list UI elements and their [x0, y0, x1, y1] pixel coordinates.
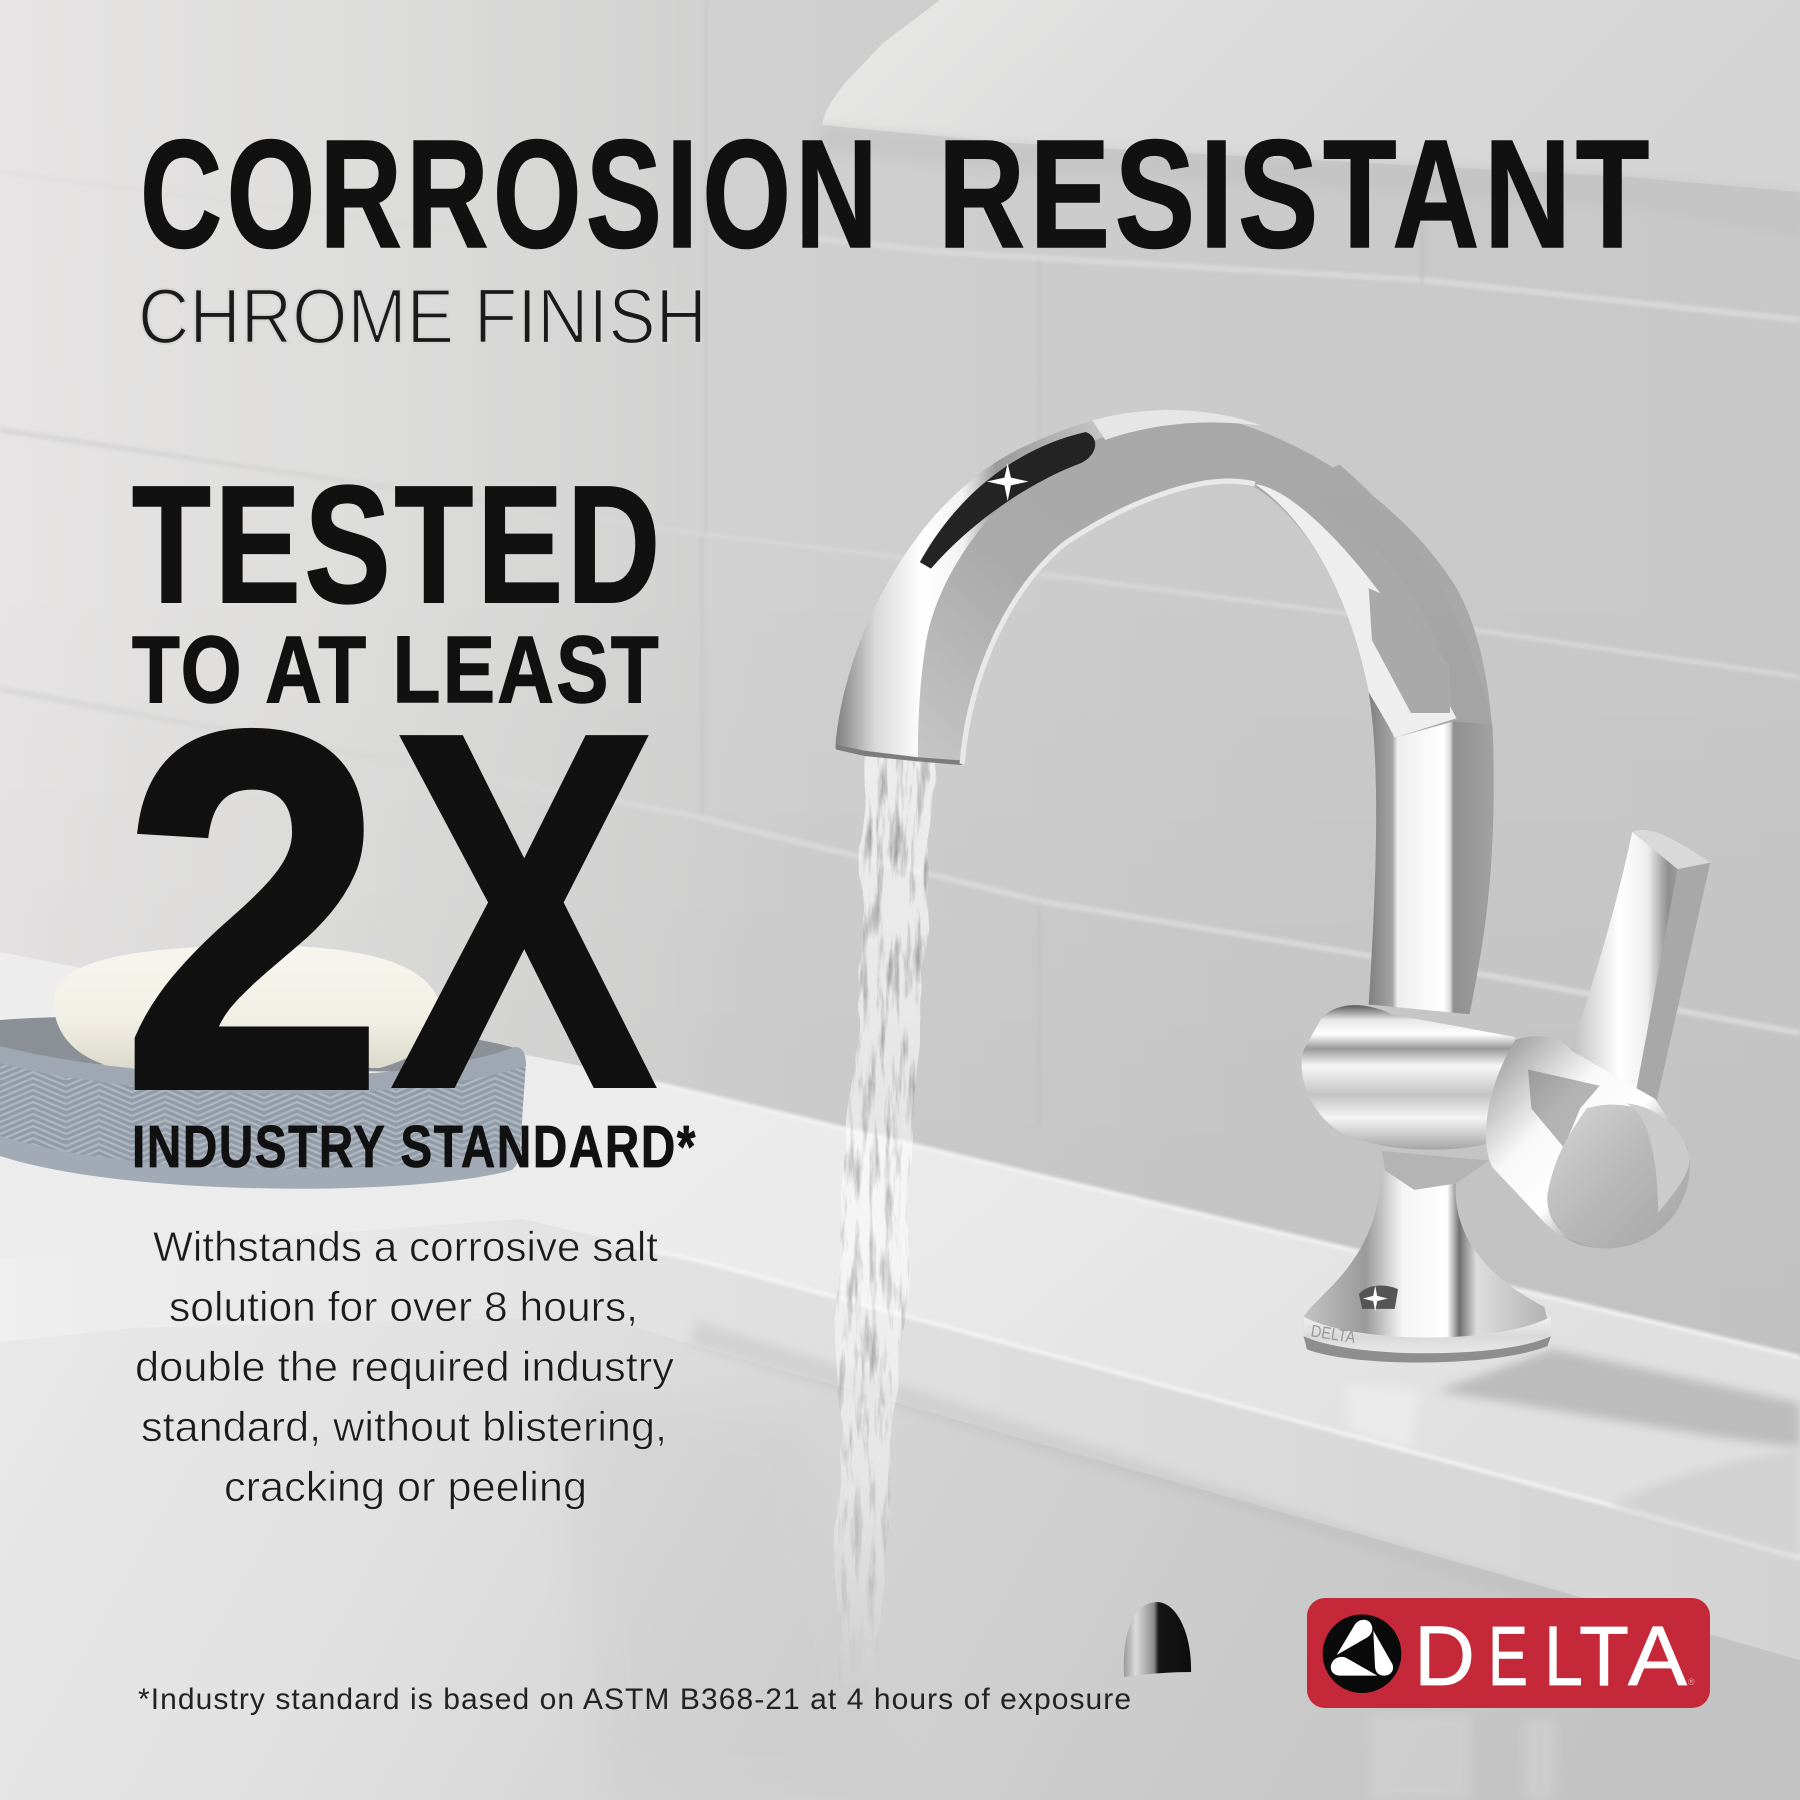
spout arch [835, 411, 1494, 1011]
counter back ledge [597, 1069, 1800, 1357]
lever top facet [1632, 830, 1710, 869]
logo emblem [1323, 1614, 1401, 1693]
logo wordmark: E [1488, 1609, 1528, 1703]
lever right facet [1635, 863, 1710, 1109]
soap bar [54, 945, 441, 1068]
base engraved mark: DELTA [1309, 1322, 1357, 1348]
spout right outer band [1294, 465, 1494, 1011]
body description text [135, 1223, 674, 1510]
logo wordmark: D [1414, 1609, 1475, 1703]
tile grout lines [0, 0, 1800, 1125]
big number: 2X [121, 626, 661, 1196]
overflow hole [1124, 1602, 1191, 1677]
fixture under-shadow [822, 125, 1800, 235]
lever handle [1570, 830, 1710, 1109]
big number: 2X: 2 [121, 626, 385, 1196]
base ring [1304, 1317, 1551, 1357]
barrel body [1302, 1005, 1515, 1150]
nozzle edge [835, 744, 962, 765]
logo wordmark [1414, 1609, 1687, 1703]
sparkle [987, 463, 1028, 501]
soap dish with soap [0, 945, 526, 1189]
base gasket [1304, 1336, 1551, 1363]
logo wordmark: A [1628, 1609, 1687, 1703]
falling water stream [836, 755, 932, 1695]
heading: corrosion resistant: CORROSION [140, 108, 882, 280]
spout front face [835, 409, 1170, 759]
dish patterned wall [0, 1060, 526, 1171]
footnote: *Industry standard is based on ASTM B368-21 at 4 hours of exposure [138, 1683, 1131, 1716]
dish rim [0, 1046, 526, 1093]
counter front band [0, 1219, 1800, 1660]
front band highlight edge [600, 1240, 1800, 1558]
basin curve on counter [1610, 1448, 1800, 1558]
inner reflection [1369, 588, 1450, 713]
stem top reflection [1382, 1151, 1489, 1190]
Delta logo [1307, 1598, 1710, 1708]
big number: 2X: X [389, 626, 661, 1196]
sink front below counter [0, 1313, 1800, 1800]
body description text: cracking or peeling [224, 1463, 587, 1510]
counter top surface [0, 952, 1800, 1558]
wall lower shade [0, 0, 1800, 1400]
dish foot [0, 1136, 522, 1189]
claim: tested: TESTED [132, 452, 664, 638]
logo wordmark: T [1579, 1609, 1629, 1703]
body description text: Withstands a corrosive salt [153, 1223, 658, 1270]
claim: to at least: TO AT LEAST [132, 617, 661, 723]
subheading: chrome finish: CHROME FINISH [138, 272, 707, 360]
logo wordmark: L [1544, 1609, 1583, 1703]
lever hub [1486, 1036, 1688, 1248]
body description text: solution for over 8 hours, [169, 1283, 638, 1330]
column [1369, 692, 1494, 1014]
top rim highlight [1092, 410, 1261, 440]
faucet reflections on counter [1345, 1385, 1420, 1450]
inner rim line [962, 481, 1255, 764]
chrome faucet [835, 409, 1710, 1363]
stem and flared base [1304, 1151, 1551, 1363]
heading: corrosion resistant [140, 108, 1654, 280]
sink soft shadow [560, 1380, 900, 1800]
wall fixture top right [822, 0, 1800, 192]
spout inner chrome [1255, 484, 1457, 770]
lower right reflection [1370, 1715, 1555, 1800]
dark reflection streak [920, 432, 1095, 569]
body description text: standard, without blistering, [141, 1403, 667, 1450]
faucet cast shadow on counter [1437, 1349, 1800, 1448]
claim: industry standard: INDUSTRY STANDARD* [132, 1114, 697, 1180]
shadow under counter [690, 1320, 1577, 1612]
body description text: double the required industry [135, 1343, 674, 1390]
cap bright facet [1626, 1103, 1689, 1213]
registered mark: ® [1688, 1677, 1695, 1687]
base dark sparkle area [1359, 1286, 1398, 1309]
hub end cap [1547, 1105, 1690, 1248]
hub reflection [1528, 1070, 1600, 1148]
